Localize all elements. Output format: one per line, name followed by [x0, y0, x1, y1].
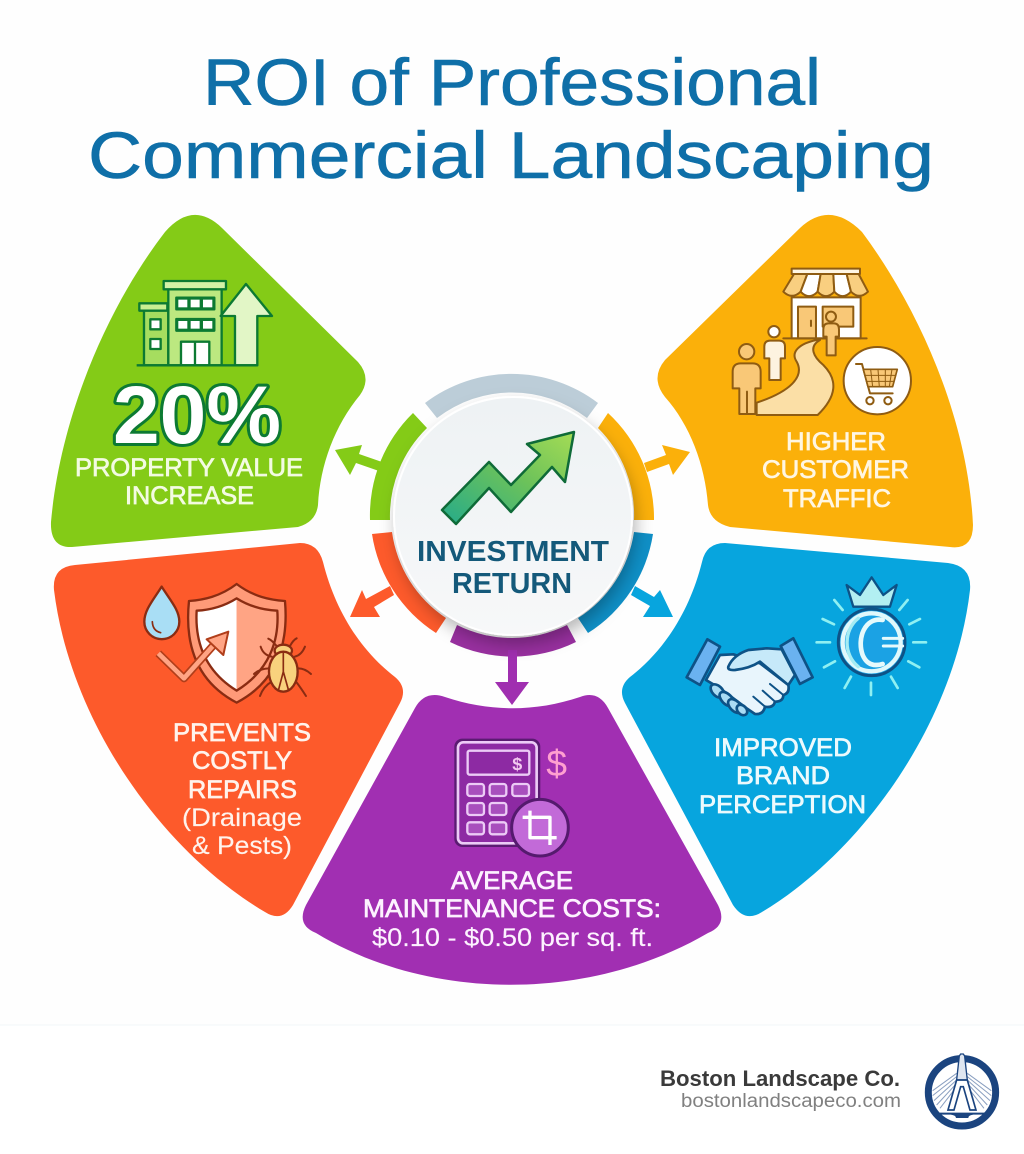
hub label: RETURN: [452, 568, 572, 600]
label: improved brand perception: [699, 734, 866, 819]
icon: calculator with dollar and crop badge: [454, 739, 568, 856]
label: higher customer traffic: HIGHER: [786, 428, 886, 456]
logo: bridge emblem: [928, 1054, 996, 1126]
icon: buildings with up arrow: [137, 281, 272, 365]
label: price per square foot: $0.10 - $0.50 per sq. ft.: [372, 924, 653, 952]
title: Commercial Landscaping: [88, 118, 934, 192]
label: average maintenance costs: [363, 867, 661, 923]
panel: prevents repairs: [54, 543, 403, 916]
ring segment and arrow: green: [335, 413, 427, 520]
label: improved brand perception: BRAND: [736, 762, 830, 790]
label: higher customer traffic: TRAFFIC: [783, 485, 891, 513]
icon: handshake: [687, 638, 813, 717]
ring segment and arrow: purple: [450, 625, 576, 705]
website: bostonlandscapeco.com: [681, 1091, 901, 1112]
panel: property value: [51, 215, 366, 547]
label: prevents costly repairs: PREVENTS: [173, 719, 311, 747]
icon: rising arrow: [442, 432, 574, 524]
label: property value increase: [75, 454, 303, 510]
label: higher customer traffic: CUSTOMER: [762, 456, 909, 484]
ring segment and arrow: yellow: [598, 413, 690, 520]
title: ROI of Professional: [203, 45, 821, 119]
panel: brand perception: [622, 543, 970, 916]
ring segment and arrow: orange: [350, 532, 446, 633]
hub label: [417, 536, 609, 600]
icon: calculator with dollar and crop badge: $: [512, 754, 522, 774]
title: [88, 45, 934, 192]
ring segment and arrow: blue: [578, 532, 673, 633]
icon: storefront, customers and cart: [733, 269, 911, 415]
label: higher customer traffic: [762, 428, 909, 513]
label: drainage and pests: & Pests): [192, 832, 292, 860]
icon: drop, shield and pest: [144, 584, 311, 703]
brand name: Boston Landscape Co.: [660, 1066, 900, 1091]
label: property value increase: INCREASE: [125, 482, 254, 510]
label: average maintenance costs: AVERAGE: [451, 867, 573, 895]
panel: customer traffic: [658, 215, 973, 547]
footer: [0, 1025, 1024, 1154]
label: improved brand perception: PERCEPTION: [699, 791, 866, 819]
label: improved brand perception: IMPROVED: [714, 734, 852, 762]
icon: calculator with dollar and crop badge: $: [546, 742, 567, 784]
label: prevents costly repairs: [173, 719, 311, 804]
panel: maintenance costs: [303, 695, 721, 985]
stat: 20%: 20%: [113, 370, 281, 461]
label: drainage and pests: (Drainage: [182, 804, 302, 832]
label: property value increase: PROPERTY VALUE: [75, 454, 303, 482]
hub: investment return: [394, 397, 632, 635]
hub ring and arrows: [335, 374, 690, 705]
label: drainage and pests: [182, 804, 302, 860]
label: prevents costly repairs: REPAIRS: [188, 776, 297, 804]
label: average maintenance costs: MAINTENANCE COSTS:: [363, 895, 661, 923]
icon: crowned brand emblem: [817, 577, 926, 695]
label: prevents costly repairs: COSTLY: [192, 747, 292, 775]
hub label: INVESTMENT: [417, 536, 609, 568]
